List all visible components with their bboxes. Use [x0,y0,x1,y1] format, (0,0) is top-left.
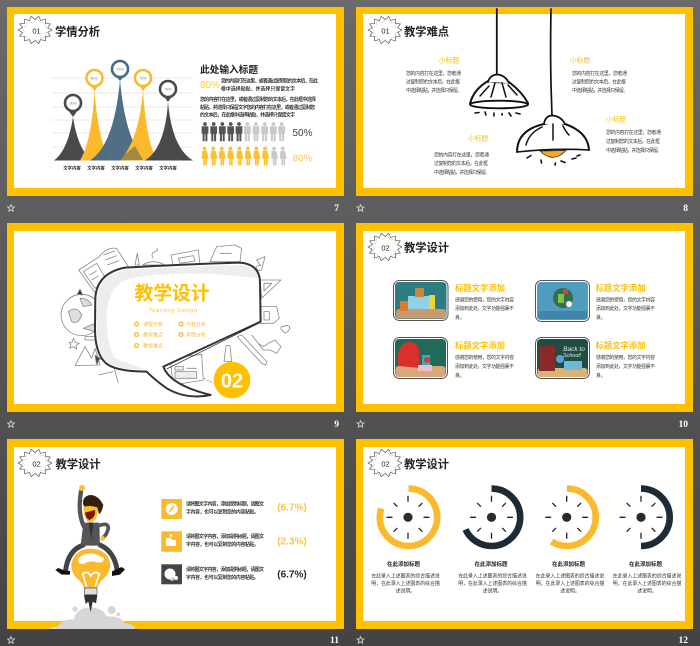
gauge 4: 在此添加标题 [629,560,662,568]
badge 01 [368,16,402,44]
item row 3 [161,564,307,584]
gauge 3 [536,489,604,594]
footer: star and page number [357,420,688,430]
gauge 2: 在此录入上述图表的综合描述说 [458,572,527,580]
heading: 教学设计 [404,457,449,471]
panel: slide 12 dial gauges [356,439,693,646]
sub heading and text: 您的内容打在这里，或者通过复制您的文本后，在此框中选择 [200,96,316,103]
illustration: man riding light bulb rocket [48,485,135,635]
flame [84,595,97,612]
photo: classroom desk [394,280,448,320]
text: card 1: 感谢您的使用，您的文字内容 [455,296,514,304]
gauge 2: 在此添加标题 [474,560,508,568]
text: card 3: 标题文字添加 [455,340,505,350]
footer: star and page number: 12 [678,636,688,646]
sub heading and text [200,63,318,118]
sub heading and text: 您的内容打在这里，或者通过复制您的文本后，在此 [221,78,318,84]
footer: star and page number: 10 [678,420,688,430]
heading: 教学难点 [404,24,449,38]
pin markers: 30% [69,102,77,106]
footer: star and page number [357,636,688,646]
pictogram row 50% [202,122,313,141]
axis labels: 文字内容 [111,164,129,172]
photo: blue stationery splash [536,280,590,322]
peak chart [52,61,193,172]
panel: slide 10 teaching design cards [356,223,693,430]
text: card 2: 添加到此处，文字功能强襄不 [596,305,655,312]
text block: top left: 小标题 [439,56,459,64]
axis labels: 文字内容 [159,164,177,172]
item row 1 [161,499,307,519]
panel: slide 11 rocket bulb [7,439,344,646]
text: card 1: 标题文字添加 [455,283,505,293]
panel: slide 8 teaching difficulties [356,7,693,214]
badge 01 [18,16,52,44]
text block: bottom right: 中选择粘贴，并选择只保留。 [606,147,662,154]
text: card 2: 标题文字添加 [596,283,646,293]
item row 3: (6.7%) [277,570,307,580]
footer: star and page number [8,420,339,430]
gauge 3: 在此添加标题 [552,560,585,568]
footer: star and page number: 8 [683,204,688,214]
gauge 2: 述说明。 [483,588,502,594]
text block: bottom right: 过复制您的文本后，在此框 [606,138,660,145]
footer: star and page number: 7 [334,204,339,214]
text block: bottom right: 小标题 [606,114,626,124]
badge 02 [18,449,52,477]
text block: top left: 中选择粘贴，并选择只保留。 [406,87,462,94]
axis labels: 文字内容 [87,164,105,172]
text: card 2: 感谢您的使用，您的文字内容 [596,296,655,304]
bullet list: 课程分析 [143,321,163,328]
arms [80,491,84,527]
text: card 4: 感谢您的使用，您的文字内容 [596,354,655,361]
gauge 4: 在此录入上述图表的综合描述说 [613,572,681,580]
section number 02 [214,362,250,398]
gauge 1: 在此录入上述图表的综合描述说 [371,572,440,580]
footer: star and page number [8,204,339,214]
footer: star and page number: 11 [330,636,339,646]
bullet list [135,321,206,350]
title: 教学设计 [134,282,210,304]
text block: bottom left: 小标题 [468,134,488,142]
bullet list: 教学重点 [143,332,163,338]
gauge 2 [458,489,527,594]
item row 3: 字内容，也可以复制您的内容粘贴。 [186,574,259,581]
illustration: hanging lamp right with bulb [517,9,589,165]
panel: slide 7 student analysis [7,7,344,214]
pin markers: 70% [164,88,172,92]
text: card 4: 良。 [596,372,606,379]
panel: slide 9 section cover [7,223,344,430]
text: card 1 [455,283,514,321]
axis labels: 文字内容 [63,164,81,172]
text block: top left: 过复制您的文本后，在此框 [406,78,460,86]
text block: bottom left: 过复制您的文本后，在此框 [434,160,488,167]
axis labels: 文字内容 [135,164,153,172]
heading: 教学设计 [56,457,100,471]
badge 02 [368,233,402,261]
text block: top right: 您的内容打在这里，您者通 [572,70,627,77]
pictogram row 50%: 50% [292,128,313,139]
item row 2 [161,531,307,552]
torso [81,523,100,546]
illustration: school doodles [61,245,290,385]
photo: back to school: Back to [563,346,585,353]
heading: 教学设计 [404,240,449,254]
text block: top left [406,56,462,94]
badge 02: 02 [381,460,390,468]
speech bubble [95,263,261,396]
sub heading and text: 粘贴，并选择只保留文字您的内容打在这里，或者通过复制您 [200,104,315,111]
pictogram row 80%: 80% [292,154,313,164]
bulb [71,549,110,589]
photo: red backpack [394,338,448,378]
badge 02: 02 [381,244,390,252]
text: card 2 [596,283,655,321]
photo: back to school: School! [563,353,582,359]
text block: top left: 您的内容打在这里，您者通 [406,70,461,77]
item row 1: 请将图文字内容，添加提供标题，请图文 [186,500,264,508]
text: card 3 [455,340,514,379]
pin markers [65,61,176,117]
text block: top right: 小标题 [570,56,590,64]
text: card 3: 感谢您的使用，您的文字内容 [455,354,514,361]
bullet list: 学情分析 [186,332,206,338]
footer: star and page number: 9 [334,420,339,430]
badge 02 [368,449,402,477]
pictogram row 80% [202,147,313,166]
pin markers: 70% [116,68,124,72]
text: card 3: 添加到此处，文字功能强襄不 [455,363,514,370]
axis labels [63,164,177,172]
item row 3: 请将图文字内容，添加提供标题，请图文 [186,566,264,573]
item row 1: 字内容，也可以复制您的内容粘贴。 [186,508,259,516]
gauge 1: 述说明。 [396,588,415,594]
footer: star and page number [8,636,339,646]
text block: bottom right: 您的内容打在这里，您者通 [606,129,661,136]
text block: top right: 过复制您的文本后，在此框 [572,78,626,86]
gauge 3: 明，在此录入上述图表的综合描 [536,580,604,587]
bullet list: 内容分析 [186,321,206,328]
text: card 4: 标题文字添加 [596,340,646,350]
gauge 4: 明，在此录入上述图表的综合描 [613,580,681,587]
footer: star and page number [357,204,688,214]
item row 2: 请将图文字内容，添加提供标题，请图文 [186,533,264,540]
text block: top right [570,56,628,94]
gauge 2: 明，在此录入上述图表的综合描 [458,580,527,587]
head [83,504,99,522]
text block: bottom left: 您的内容打在这里，您者通 [434,152,489,158]
badge 01: 01 [381,26,390,36]
heading: 学情分析 [55,24,100,38]
text block: top right: 中选择粘贴，并选择只保留。 [572,87,628,94]
text: card 2: 良。 [596,314,606,321]
gauge 4 [612,489,681,594]
text block: bottom left [434,134,490,176]
text block: bottom left: 中选择粘贴，并选择只保留。 [434,169,490,176]
text: card 3: 良。 [455,372,465,379]
bullet list: 教学难点 [143,342,163,350]
text: card 1: 添加到此处，文字功能强襄不 [455,305,514,312]
section number 02: 02 [221,370,243,392]
gauge 3: 述说明。 [560,588,580,594]
legs and shoes [66,545,117,572]
badge 02: 02 [32,460,41,468]
text block: bottom right [606,114,662,154]
text: card 1: 良。 [455,314,465,321]
item row 2: (2.3%) [277,536,307,548]
pin markers: 60% [90,76,98,80]
sub heading and text: 的文本后，在此框中选择粘贴，并选择只保留文字 [200,112,295,118]
sub heading and text: 80% [200,80,220,91]
sub heading and text: 此处输入标题 [200,63,258,76]
gauge 1: 明，在此录入上述图表的综合描 [371,580,440,587]
text: card 4 [596,340,655,379]
gauge 4: 述说明。 [637,588,657,594]
item row 1: (6.7%) [277,502,307,514]
smoke cloud [49,606,135,629]
item row 2: 字内容，也可以复制您的内容粘贴。 [186,541,259,548]
gauge 1: 在此添加标题 [387,560,420,568]
gauge 1 [371,489,440,594]
sub heading and text: 框中选择粘贴，并选择只保留文字 [221,86,295,92]
badge 01: 01 [32,26,41,36]
photo: back to school [536,338,590,378]
subtitle: Teaching Design [149,308,197,314]
pin markers: 70% [139,76,147,80]
text: card 4: 添加到此处，文字功能强襄不 [596,363,655,370]
gauge 3: 在此录入上述图表的综合描述说 [536,572,604,580]
illustration: hanging lamp left [470,9,528,116]
